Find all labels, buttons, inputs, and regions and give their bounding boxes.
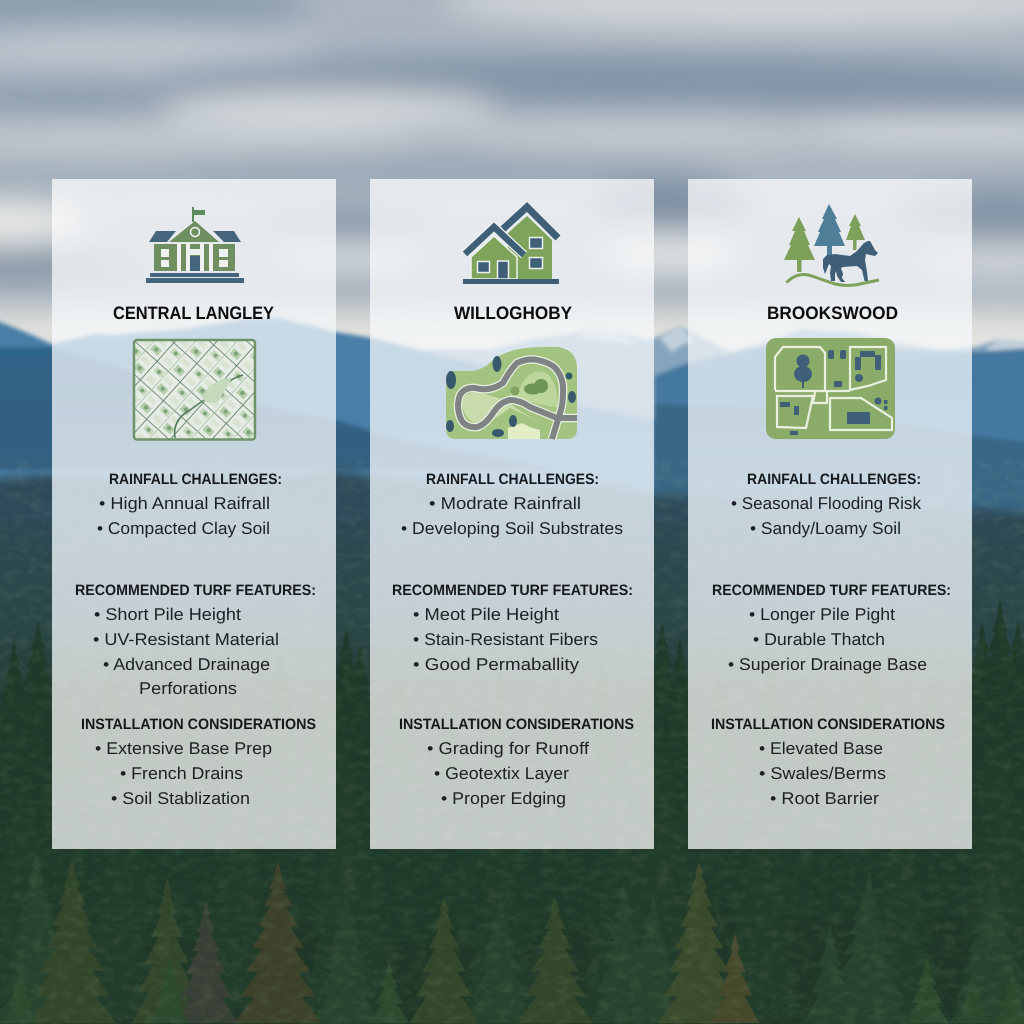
section: rainfall challenges: • Sandy/Loamy Soil bbox=[750, 519, 901, 538]
section: installation considerations: • Root Barrier bbox=[770, 789, 879, 808]
icon: houses bbox=[463, 207, 559, 284]
section: installation considerations: • Extensive Base Prep bbox=[95, 739, 272, 758]
section: recommended turf features: • Stain-Resistant Fibers bbox=[413, 630, 598, 649]
icon: trees and horse bbox=[784, 204, 879, 286]
section: rainfall challenges: RAINFALL CHALLENGES: bbox=[426, 471, 599, 488]
section: installation considerations: • French Drains bbox=[120, 764, 243, 783]
section: recommended turf features: • Superior Drainage Base bbox=[728, 655, 927, 674]
section: recommended turf features bbox=[75, 582, 316, 698]
section: installation considerations: • Soil Stablization bbox=[111, 789, 250, 808]
section: recommended turf features bbox=[712, 582, 951, 674]
background: distant mountains bbox=[0, 314, 1024, 520]
section: recommended turf features: • Durable Thatch bbox=[753, 630, 885, 649]
section: installation considerations: • Grading for Runoff bbox=[427, 739, 589, 758]
section: installation considerations: INSTALLATION CONSIDERATIONS bbox=[399, 716, 634, 733]
icon: town hall bbox=[146, 207, 244, 283]
map: winding road bbox=[446, 347, 577, 439]
section: recommended turf features: • Advanced Drainage bbox=[103, 655, 270, 674]
section: recommended turf features: • Short Pile Height bbox=[94, 605, 241, 624]
section: rainfall challenges: • Modrate Rainfrall bbox=[429, 494, 581, 513]
panel: Brookswood bbox=[688, 179, 972, 849]
section: rainfall challenges: • Developing Soil Substrates bbox=[401, 519, 623, 538]
section: rainfall challenges bbox=[401, 471, 623, 538]
section: recommended turf features: RECOMMENDED TURF FEATURES: bbox=[392, 582, 633, 599]
section: recommended turf features: Perforations bbox=[139, 679, 237, 698]
section: recommended turf features: RECOMMENDED TURF FEATURES: bbox=[712, 582, 951, 599]
section: installation considerations: • Swales/Berms bbox=[759, 764, 886, 783]
section: rainfall challenges bbox=[97, 471, 282, 538]
heading: Central Langley: CENTRAL LANGLEY bbox=[113, 303, 274, 323]
section: recommended turf features: • UV-Resistant Material bbox=[93, 630, 279, 649]
section: rainfall challenges bbox=[731, 471, 921, 538]
background: far forest edge bbox=[0, 470, 1024, 600]
section: rainfall challenges: • High Annual Raifrall bbox=[99, 494, 270, 513]
heading: Brookswood: BROOKSWOOD bbox=[767, 303, 898, 323]
section: installation considerations: INSTALLATION CONSIDERATIONS bbox=[711, 716, 945, 733]
section: installation considerations bbox=[711, 716, 945, 808]
section: installation considerations: • Proper Edging bbox=[441, 789, 566, 808]
background: cloudy sky bbox=[0, 0, 1024, 480]
panel: Central Langley bbox=[52, 179, 336, 849]
map: rural parcels bbox=[766, 338, 895, 439]
section: recommended turf features: • Meot Pile Height bbox=[413, 605, 559, 624]
background: forest base bbox=[0, 520, 1024, 1024]
section: rainfall challenges: • Compacted Clay Soil bbox=[97, 519, 270, 538]
section: recommended turf features: • Longer Pile Pight bbox=[749, 605, 895, 624]
panel: Willoghoby bbox=[370, 179, 654, 849]
section: rainfall challenges: • Seasonal Flooding Risk bbox=[731, 494, 921, 513]
section: installation considerations bbox=[81, 716, 316, 808]
section: recommended turf features bbox=[392, 582, 633, 674]
heading: Willoghoby: WILLOGHOBY bbox=[454, 303, 572, 323]
section: installation considerations: • Elevated Base bbox=[759, 739, 883, 758]
section: installation considerations: INSTALLATION CONSIDERATIONS bbox=[81, 716, 316, 733]
map: street grid bbox=[134, 340, 255, 440]
section: installation considerations: • Geotextix Layer bbox=[434, 764, 569, 783]
section: recommended turf features: • Good Permaballity bbox=[413, 655, 580, 674]
section: rainfall challenges: RAINFALL CHALLENGES: bbox=[109, 471, 282, 488]
section: installation considerations bbox=[399, 716, 634, 808]
section: rainfall challenges: RAINFALL CHALLENGES: bbox=[747, 471, 921, 488]
section: recommended turf features: RECOMMENDED TURF FEATURES: bbox=[75, 582, 316, 599]
background: conifer forest bbox=[0, 520, 1024, 1024]
